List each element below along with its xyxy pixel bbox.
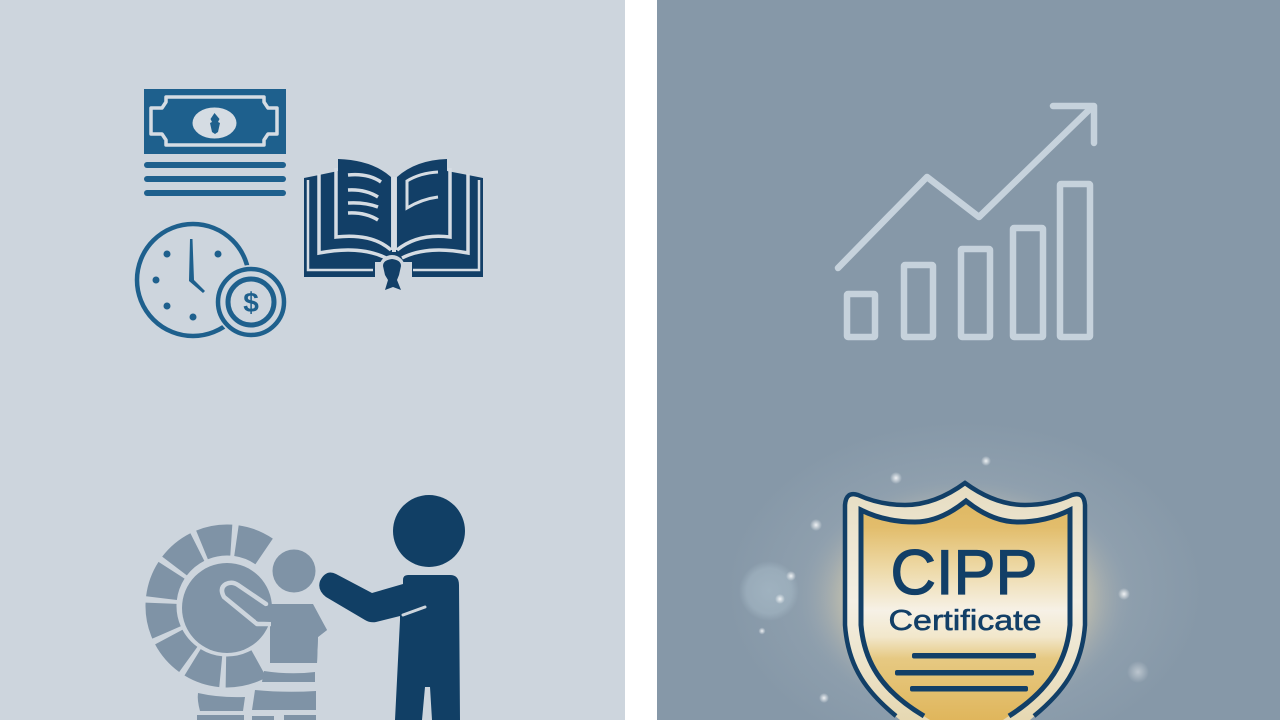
shield text lines — [895, 653, 1036, 692]
panel: white divider — [625, 0, 657, 720]
icon: banknote stack — [144, 89, 286, 196]
chart: rising bars with arrow — [838, 106, 1094, 337]
panel: right benefits — [657, 0, 1280, 720]
icon: clock with coin: $ — [243, 287, 259, 318]
panel: left costs — [0, 0, 625, 720]
bokeh sparkles — [739, 456, 1149, 703]
shield heading CIPP: CIPP — [890, 538, 1038, 608]
glow: radiant halo — [725, 420, 1205, 720]
icon: person pushing — [319, 495, 465, 720]
icon: CIPP certificate shield — [845, 483, 1085, 720]
icon: grey gear head with hand — [139, 518, 327, 720]
shield subheading: Certificate — [888, 605, 1042, 637]
icon: open book — [304, 159, 483, 290]
icon: clock with coin — [137, 224, 288, 339]
